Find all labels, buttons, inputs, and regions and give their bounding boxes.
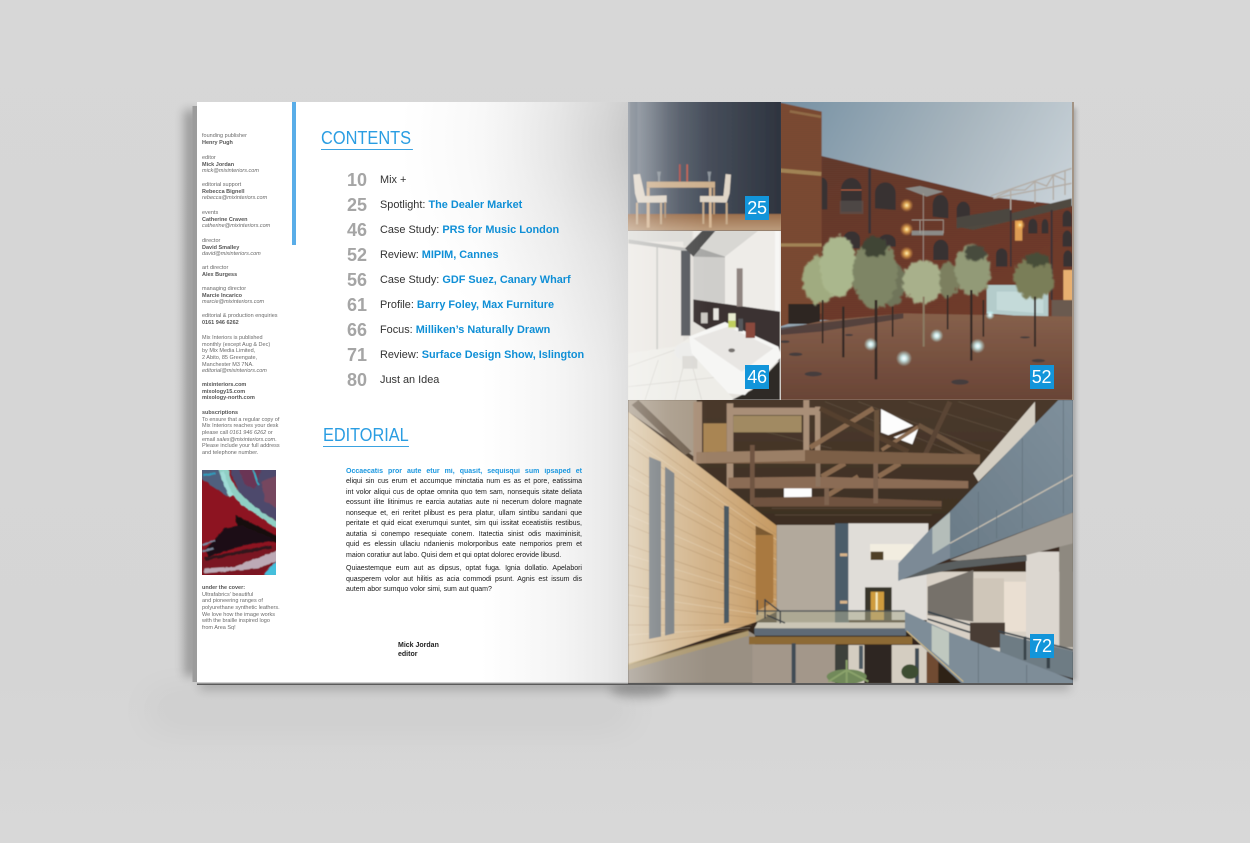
sidebar: staff credits: founding publisher xyxy=(202,133,247,139)
magazine cast shadow xyxy=(150,102,1076,725)
sidebar: staff credits: and telephone number. xyxy=(202,450,258,456)
sidebar: staff credits: events xyxy=(202,210,218,216)
contents list: 56 xyxy=(347,270,367,290)
editor signature: editor xyxy=(398,651,417,658)
heading: contents: CONTENTS xyxy=(321,128,411,148)
sidebar: staff credits: Please include your full address xyxy=(202,443,280,449)
sidebar: staff credits: editor xyxy=(202,155,216,161)
backdrop and magazine spread with photographs xyxy=(174,102,1078,720)
sidebar: staff credits: by Mix Media Limited, xyxy=(202,348,255,354)
sidebar: staff credits: mixinteriors.com xyxy=(202,382,246,388)
contents list: Profile: Barry Foley, Max Furniture xyxy=(380,299,554,311)
contents list: 52 xyxy=(347,245,367,265)
contents list: Review: Surface Design Show, Islington xyxy=(380,349,584,361)
editorial body text: autatia si conempo resequiate conem. Itatectia sinist odis maximinisit, xyxy=(346,531,582,538)
sidebar: staff credits: and pioneering ranges of xyxy=(202,598,263,604)
page number badge 46: 46 xyxy=(747,367,767,387)
page number badge 72 xyxy=(1030,634,1054,658)
contents list: 66 xyxy=(347,320,367,340)
sidebar: staff credits: To ensure that a regular copy of xyxy=(202,417,279,423)
sidebar: staff credits xyxy=(202,133,280,631)
contents list: Case Study: PRS for Music London xyxy=(380,224,559,236)
editorial body text: autem abor sumquo volor simi, sum aut quam? xyxy=(346,586,492,593)
sidebar: staff credits: david@mixinteriors.com xyxy=(202,251,261,257)
sidebar: staff credits: Alex Burgess xyxy=(202,272,237,278)
editorial body text: Quiaestemque eum aut as dipsus, optat fuga. Ignia dollatio. Apelabori xyxy=(346,565,582,572)
spine gloss over the photographs xyxy=(628,102,708,683)
sidebar: staff credits: under the cover: xyxy=(202,585,245,591)
page number badge 52: 52 xyxy=(1032,367,1051,387)
sidebar: staff credits: Manchester M3 7NA. xyxy=(202,362,254,368)
page number badge 25 xyxy=(745,196,769,220)
blue sidebar bar xyxy=(292,102,296,245)
contents list: 10 xyxy=(347,170,367,190)
sidebar: staff credits: Henry Pugh xyxy=(202,140,233,146)
contents list: 25 xyxy=(347,195,367,215)
contents list: Just an Idea xyxy=(380,374,439,386)
sidebar: staff credits: editorial support xyxy=(202,182,241,188)
sidebar: staff credits: monthly (except Aug & Dec) xyxy=(202,342,270,348)
left page xyxy=(197,102,628,684)
sidebar: staff credits: marcie@mixinteriors.com xyxy=(202,299,264,305)
contents list: 71 xyxy=(347,345,367,365)
contents list xyxy=(347,170,584,390)
editorial body text xyxy=(346,468,582,593)
heading: editorial: EDITORIAL xyxy=(323,425,409,445)
sidebar: staff credits: We love how the image works xyxy=(202,612,275,618)
sidebar: staff credits: from Area Sq! xyxy=(202,625,236,631)
editor signature xyxy=(398,642,439,658)
editorial body text: peritate et quid eicat exerumqui suntet, sim qui issitat eceatistiis restibus, xyxy=(346,520,582,527)
photo: courtyard with trees, page 52 xyxy=(780,100,1073,400)
editorial body text: eossunt ilite litinimus re earcia autatias aute ni necerum dolore magnate xyxy=(346,499,582,506)
sidebar: staff credits: mick@mixinteriors.com xyxy=(202,168,259,174)
photo: dining room, page 25 xyxy=(625,100,782,232)
contents list: 46 xyxy=(347,220,367,240)
sidebar: staff credits: 0161 946 6262 xyxy=(202,320,239,326)
sidebar: staff credits: 2 Abito, 85 Greengate, xyxy=(202,355,257,361)
sidebar: staff credits: editorial@mixinteriors.com xyxy=(202,368,267,374)
cover painting xyxy=(202,465,278,577)
sidebar: staff credits: email sales@mixinteriors.com. xyxy=(202,437,277,443)
contents list: Case Study: GDF Suez, Canary Wharf xyxy=(380,274,571,286)
sidebar: staff credits: mixology-north.com xyxy=(202,395,255,401)
sidebar: staff credits: catherine@mixinteriors.com xyxy=(202,223,270,229)
editorial body text: Occaecatis pror aute etur mi, quasit, sequisqui sum ipsaped et xyxy=(346,468,582,475)
editorial body text: quasperem volor aut hilitis as acia commodi psunt. Agnis est issum dis xyxy=(346,576,582,583)
contents list: 61 xyxy=(347,295,367,315)
page number badge 72: 72 xyxy=(1032,636,1052,656)
sidebar: staff credits: editorial & production enquiries xyxy=(202,313,278,319)
sidebar: staff credits: Catherine Craven xyxy=(202,217,248,223)
contents list: Spotlight: The Dealer Market xyxy=(380,199,522,211)
sidebar: staff credits: mixology15.com xyxy=(202,389,245,395)
sidebar: staff credits: Mix Interiors reaches your desk xyxy=(202,423,278,429)
sidebar: staff credits: rebecca@mixinteriors.com xyxy=(202,195,267,201)
sidebar: staff credits: Mix Interiors is published xyxy=(202,335,263,341)
page number badge 46 xyxy=(745,365,769,388)
sidebar: staff credits: Marcie Incarico xyxy=(202,293,242,299)
editor signature: Mick Jordan xyxy=(398,642,439,649)
sidebar: staff credits: Ultrafabrics’ beautiful xyxy=(202,592,253,598)
contents list: Mix + xyxy=(380,174,406,186)
page number badge 52 xyxy=(1030,365,1054,388)
sidebar: staff credits: Rebecca Bignell xyxy=(202,189,244,195)
photo: timber atrium interior, page 72 xyxy=(625,395,1082,695)
sidebar: staff credits: Mick Jordan xyxy=(202,162,234,168)
sidebar: staff credits: subscriptions xyxy=(202,410,238,416)
contents list: Review: MIPIM, Cannes xyxy=(380,249,499,261)
editorial body text: int volor aliqui cus de optae omnita quo tem sam, nonsequis sitate deliata xyxy=(346,489,582,496)
sidebar: staff credits: with the braille inspired logo xyxy=(202,618,270,624)
editorial body text: quid es elessin ullaciu ndanienis molorporibus eate nemporios prem et xyxy=(346,541,582,548)
contents list: Focus: Milliken’s Naturally Drawn xyxy=(380,324,550,336)
photo: bathroom, page 46 xyxy=(625,231,782,401)
sidebar: staff credits: please call 0161 946 6262 or xyxy=(202,430,273,436)
page number badge 25: 25 xyxy=(747,198,767,218)
editorial body text: maion coratiur aut labo. Quisi dem et qui optat dolorec erovide libusd. xyxy=(346,552,561,558)
editorial body text: eliqui sin cus erum et accumque minctatia num es as et pore, eatissima xyxy=(346,478,582,485)
sidebar: staff credits: David Smalley xyxy=(202,245,239,251)
sidebar: staff credits: director xyxy=(202,238,220,244)
sidebar: staff credits: polyurethane synthetic leathers. xyxy=(202,605,280,611)
sidebar: staff credits: managing director xyxy=(202,286,246,292)
sidebar: staff credits: art director xyxy=(202,265,228,271)
contents list: 80 xyxy=(347,370,367,390)
editorial body text: nonseque et, eri reritet plibust es pera platur, ullam sintibu sandani que xyxy=(346,510,582,517)
